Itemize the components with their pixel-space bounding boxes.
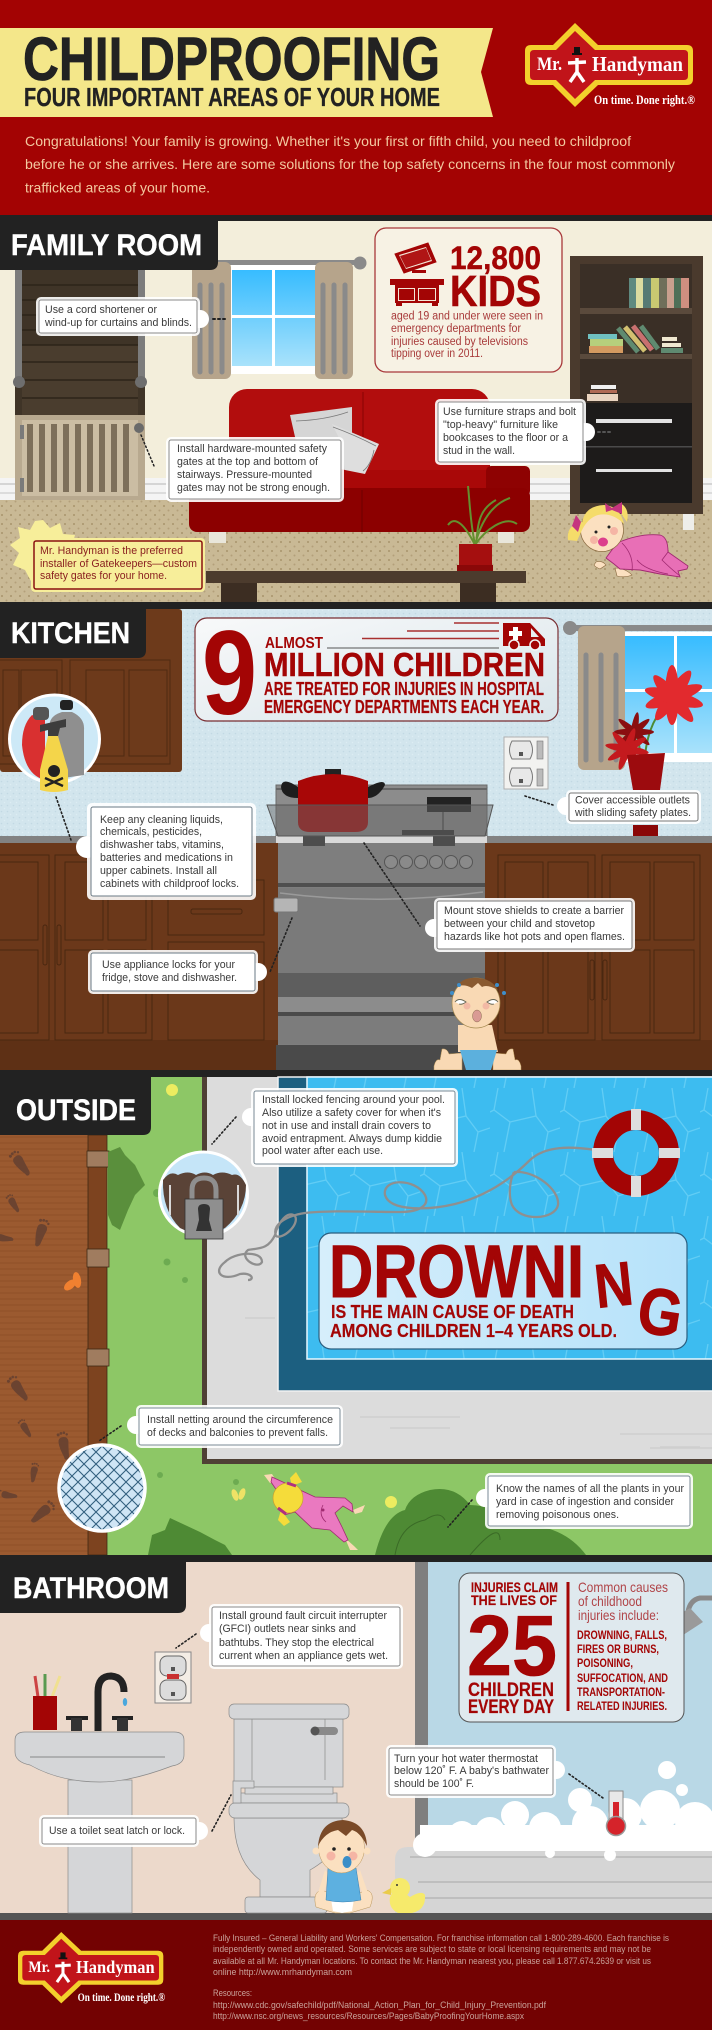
sitting baby (312, 1820, 372, 1913)
logo: Mr. Handyman: Handyman (592, 52, 683, 76)
intro text (25, 133, 675, 196)
callout: pool fencing: Also utilize a safety cover for when it's (262, 1107, 441, 1119)
sign: drowning: N (591, 1249, 636, 1322)
callout: pool fencing: avoid entrapment. Always dump kiddie (262, 1133, 442, 1145)
stat box: 25 children: 25 (467, 1599, 557, 1694)
logo: Mr. Handyman footer: Mr. (28, 1957, 50, 1976)
callout: GFCI: Install ground fault circuit interrupter (219, 1610, 387, 1622)
cleaning products (10, 695, 100, 792)
starburst (10, 520, 75, 585)
stairs (13, 270, 147, 415)
callout: cleaning liquids: Keep any cleaning liquids, (100, 814, 223, 826)
pink suit (271, 1477, 353, 1542)
callout: appliance locks (88, 918, 292, 994)
callout: cleaning liquids: dishwasher tabs, vitamins, (100, 839, 224, 851)
stat box: 9 million children (195, 606, 558, 740)
sign: drowning: G (633, 1272, 688, 1352)
butterfly yellow (230, 1487, 247, 1502)
callout: cord shortener (36, 297, 227, 336)
resources: http://www.cdc.gov/safechild/pdf/National_Action_Plan_for_Child_Injury_Prevention.pdf (213, 2000, 546, 2011)
callout: cord shortener: Use a cord shortener or (45, 304, 157, 316)
intro text: before he or she arrives. Here are some solutions for the top safety concerns in the four most commonly (25, 156, 675, 172)
stat box: 12,800 kids: KIDS (450, 267, 541, 316)
sofa (189, 389, 530, 543)
callout: furniture straps: "top-heavy" furniture like (443, 419, 558, 431)
stat box: 9 million children: ARE TREATED FOR INJURIES IN HOSPITAL (264, 679, 544, 699)
flower (166, 1084, 178, 1096)
callout: outlets: with sliding safety plates. (574, 807, 691, 819)
callout: outlets (525, 790, 701, 824)
legal text: independently owned and operated. Some services are subject to state or local licensing requirements and may not be (213, 1944, 651, 1955)
faucet (98, 1676, 124, 1731)
panel: footer (0, 1920, 712, 2030)
stat box: 25 children: POISONING, (577, 1656, 633, 1670)
footprints (0, 1149, 72, 1526)
callout: cord shortener: wind-up for curtains and blinds. (44, 317, 192, 329)
callout: cleaning liquids: batteries and medications in (100, 852, 233, 864)
logo: Mr. Handyman footer (18, 1932, 165, 2004)
callout: plants (448, 1473, 693, 1529)
stat box: 12,800 kids: aged 19 and under were seen in (391, 310, 543, 322)
deck (0, 1135, 109, 1555)
stat box: 25 children: SUFFOCATION, AND (577, 1671, 668, 1685)
panel: bathroom (0, 1562, 712, 1920)
rope (219, 1148, 595, 1280)
legs and feet (434, 1049, 521, 1070)
sink (15, 1674, 184, 1913)
stat box: 12,800 kids: injuries caused by televisions (391, 336, 528, 348)
panel: kitchen (0, 606, 712, 1070)
callout: appliance locks: fridge, stove and dishwasher. (102, 972, 237, 984)
callout: netting (99, 1405, 343, 1448)
bushes (148, 1489, 586, 1555)
icon: ambulance (503, 623, 545, 650)
callout: thermostat: below 120˚ F. A baby's bathwater (394, 1765, 549, 1777)
callout: appliance locks: Use appliance locks for your (102, 959, 235, 971)
section tab: kitchen: KITCHEN (11, 617, 130, 650)
callout: cleaning liquids: chemicals, pesticides, (100, 826, 202, 838)
stat box: 25 children (459, 1573, 684, 1722)
callout: furniture straps: Use furniture straps and bolt (443, 406, 576, 418)
stat box: 12,800 kids: 12,800 (450, 240, 541, 276)
cup with toothbrushes (35, 1676, 38, 1697)
grass details (153, 1189, 239, 1485)
callout: Gatekeepers: installer of Gatekeepers—custom (40, 558, 197, 570)
callout: cleaning liquids (56, 797, 256, 900)
pillows (290, 407, 379, 474)
callout: toilet latch: Use a toilet seat latch or lock. (49, 1825, 185, 1837)
section tab: kitchen (0, 609, 146, 658)
safety gate (15, 415, 145, 500)
stat box: 9 million children: EMERGENCY DEPARTMENTS EACH YEAR. (264, 697, 544, 717)
stat box: 25 children: RELATED INJURIES. (577, 1699, 667, 1713)
resources: Resources: (213, 1988, 252, 1999)
sign: drowning: AMONG CHILDREN 1–4 YEARS OLD. (330, 1320, 617, 1341)
legal text: available at all Mr. Handyman locations. To contact the Mr. Handyman nearest you, please call 1.877.674.2639 or visit us (213, 1956, 651, 1967)
panel: family room (0, 221, 712, 602)
stat box: 25 children: EVERY DAY (468, 1697, 554, 1718)
intro text: Congratulations! Your family is growing. Whether it's your first or fifth child, you need to childproof (25, 133, 631, 149)
head (318, 1823, 364, 1873)
callout: thermostat (386, 1745, 603, 1798)
section tab: family room: FAMILY ROOM (11, 229, 202, 262)
stat box: 25 children: DROWNING, FALLS, (577, 1628, 667, 1642)
callout: GFCI: current when an appliance gets wet. (219, 1650, 388, 1662)
callout: safety gates: gates may not be strong enough. (177, 482, 330, 494)
icon: locked fence (160, 1152, 248, 1239)
callout: toilet latch (39, 1795, 231, 1847)
legal text: online http://www.mrhandyman.com (213, 1967, 352, 1978)
icon: television on stand (390, 243, 444, 306)
callout: plants: Know the names of all the plants in your (496, 1483, 684, 1495)
sign: drowning: DROWNI (329, 1230, 584, 1313)
stat box: 25 children: INJURIES CLAIM (471, 1579, 558, 1595)
toilet (229, 1704, 349, 1913)
callout: safety gates: Install hardware-mounted safety (177, 443, 327, 455)
callout: furniture straps: bookcases to the floor or a (443, 432, 569, 444)
section tab: family room (0, 221, 218, 270)
callout: GFCI (176, 1604, 403, 1669)
upper cabinets (0, 609, 182, 772)
callout: Gatekeepers: safety gates for your home. (40, 570, 167, 582)
callout: Gatekeepers: Mr. Handyman is the preferred (40, 545, 183, 557)
intro text: trafficked areas of your home. (25, 180, 210, 196)
callout: GFCI: (GFCI) outlets near sinks and (219, 1623, 356, 1635)
callout: safety gates: gates at the top and bottom of (177, 456, 319, 468)
stove (267, 769, 493, 1070)
stat box: 25 children: TRANSPORTATION- (577, 1685, 665, 1699)
stat box: 9 million children: 9 (202, 606, 257, 740)
bookcase (570, 256, 703, 530)
callout: pool fencing (212, 1088, 458, 1167)
blue tank top (326, 1868, 361, 1902)
diaper (331, 1899, 354, 1913)
outlet GFCI (155, 1652, 191, 1703)
panel: outside (0, 1077, 712, 1555)
hands and feet (264, 1474, 365, 1550)
callout: safety gates: stairways. Pressure-mounted (177, 469, 312, 481)
subtitle: FOUR IMPORTANT AREAS OF YOUR HOME (24, 82, 440, 112)
callout: furniture straps: stud in the wall. (443, 445, 515, 457)
flowers in pot (605, 665, 705, 836)
section tab: outside (0, 1077, 151, 1135)
callout: pool fencing: Install locked fencing around your pool. (262, 1094, 445, 1106)
plant (448, 486, 517, 571)
baby lying on grass (264, 1472, 365, 1550)
stat box: 12,800 kids (375, 228, 562, 372)
flower yellow (385, 1496, 397, 1508)
logo: Mr. Handyman (525, 23, 695, 107)
bubbles (413, 1761, 712, 1861)
arms and hands (594, 561, 632, 577)
head (452, 978, 500, 1028)
resources (213, 1988, 546, 2022)
sign: drowning: IS THE MAIN CAUSE OF DEATH (331, 1301, 574, 1322)
callout: pool fencing: pool water after each use. (262, 1145, 383, 1157)
outlet with safety plates (504, 737, 548, 789)
sign: drowning (319, 1230, 688, 1352)
lower cabinets (0, 843, 712, 1070)
callout: stove shields: between your child and stovetop (444, 918, 595, 930)
section tab: bathroom: BATHROOM (13, 1572, 169, 1605)
logo: Mr. Handyman footer: Handyman (76, 1957, 155, 1977)
books (587, 278, 689, 401)
crawling baby girl (568, 502, 688, 577)
arms (318, 1870, 368, 1895)
callout: cleaning liquids: cabinets with childproof locks. (100, 878, 239, 890)
callout: plants: removing poisonous ones. (496, 1509, 619, 1521)
legs (315, 1890, 372, 1913)
window with curtain and rod (563, 621, 712, 770)
logo: Mr. Handyman: Mr. (537, 54, 562, 75)
icon: netting (59, 1445, 145, 1531)
crying baby (434, 978, 521, 1070)
callout: Gatekeepers (31, 538, 205, 592)
callout: stove shields: Mount stove shields to create a barrier (444, 905, 624, 917)
stat box: 12,800 kids: emergency departments for (391, 323, 521, 335)
callout: outlets: Cover accessible outlets (575, 794, 690, 806)
head (580, 508, 624, 552)
logo: Mr. Handyman footer: On time. Done right.® (78, 1992, 165, 2004)
stat box: 25 children: CHILDREN (468, 1680, 554, 1701)
stat box: 9 million children: MILLION CHILDREN (264, 646, 545, 683)
rubber duck (382, 1878, 425, 1913)
icon: thermometer (606, 1791, 626, 1836)
callout: plants: yard in case of ingestion and consider (496, 1496, 674, 1508)
tear drops (450, 983, 506, 995)
stat box: 25 children: THE LIVES OF (471, 1592, 557, 1608)
pool (202, 1077, 712, 1464)
legal text (213, 1933, 669, 1978)
resources: http://www.nsc.org/news_resources/Resources/Pages/BabyProofingYourHome.aspx (213, 2011, 524, 2022)
callout: safety gates (141, 435, 344, 502)
title: CHILDPROOFING (23, 25, 440, 93)
callout: GFCI: bathtubs. They stop the electrical (219, 1637, 374, 1649)
head and pigtails (278, 1472, 302, 1526)
stat box: 12,800 kids: tipping over in 2011. (391, 348, 483, 360)
butterfly (62, 1271, 82, 1293)
bush (108, 1147, 145, 1230)
section tab: outside: OUTSIDE (16, 1094, 136, 1127)
pink body (606, 535, 688, 577)
callout: stove shields: hazards like hot pots and open flames. (444, 931, 625, 943)
title banner (0, 25, 493, 117)
callout: stove shields (364, 843, 635, 952)
window with curtains (192, 256, 366, 379)
callout: furniture straps (435, 399, 612, 465)
callout: netting: of decks and balconies to prevent falls. (147, 1427, 328, 1439)
callout: thermostat: Turn your hot water thermostat (394, 1753, 538, 1765)
section tab: bathroom (0, 1562, 186, 1613)
neck and chest (458, 1025, 498, 1052)
stat box: 25 children: of childhood (578, 1593, 642, 1609)
callout: cleaning liquids: upper cabinets. Install all (100, 865, 217, 877)
stat box: 9 million children: ALMOST (265, 635, 323, 652)
pot (281, 769, 385, 832)
stat box: 25 children: injuries include: (578, 1607, 659, 1623)
callout: netting: Install netting around the circumference (147, 1414, 333, 1426)
stat box: 25 children: FIRES OR BURNS, (577, 1642, 659, 1656)
coffee table (206, 571, 526, 602)
callout: thermostat: should be 100˚ F. (394, 1778, 474, 1790)
icon: life ring (592, 1109, 680, 1197)
diaper (460, 1050, 497, 1070)
bathtub (395, 1761, 712, 1913)
panel: header (0, 0, 712, 215)
callout: pool fencing: not in use and install drain covers to (262, 1120, 431, 1132)
shower head (666, 1598, 712, 1637)
stat box: 25 children: Common causes (578, 1579, 668, 1595)
